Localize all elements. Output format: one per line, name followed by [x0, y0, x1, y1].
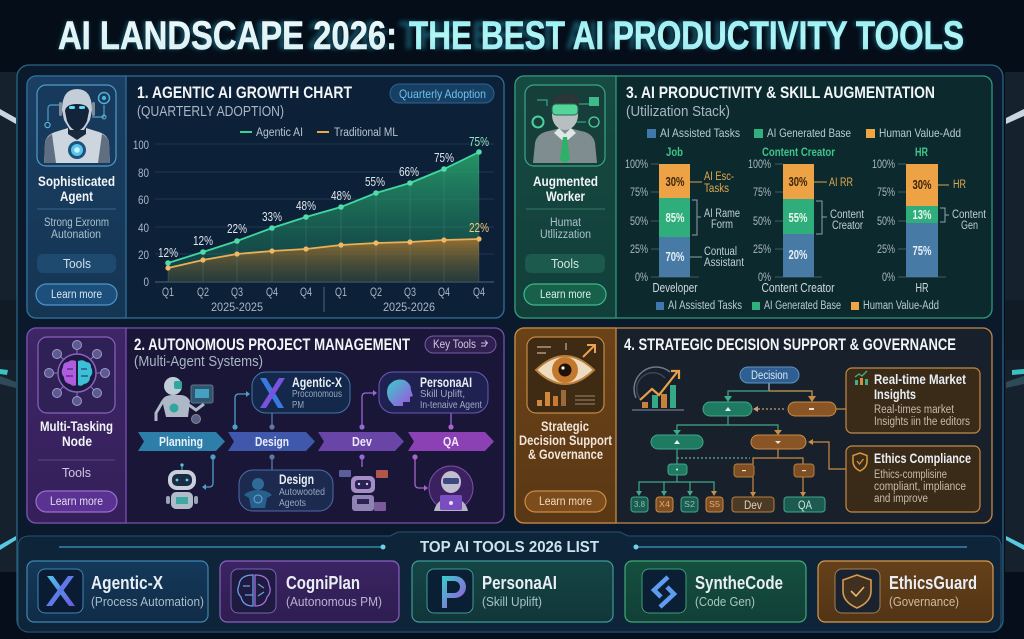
- stacked bar chart: AI RR: [829, 177, 853, 189]
- top legend: Human Value-Add: [879, 126, 961, 140]
- line chart: Q2: [197, 285, 209, 299]
- stacked bar chart: Gen: [961, 220, 978, 232]
- stacked bar chart: Content Creator: [762, 145, 835, 159]
- line chart: Q4: [300, 285, 312, 299]
- callout: ethics compliance: Ethics Compliance: [874, 450, 971, 466]
- sidebar heading: Agent: [60, 189, 93, 204]
- line chart: Q1: [162, 285, 174, 299]
- top legend: [647, 126, 961, 140]
- stacked bar chart: 0%: [758, 270, 771, 284]
- sidebar heading: Multi-Tasking: [40, 419, 113, 434]
- box: design agents: [239, 470, 333, 511]
- learn more button: [524, 284, 606, 305]
- line chart: 48%: [296, 199, 316, 213]
- icon: planning robot: [156, 377, 213, 424]
- card: PersonaAI: PersonaAI: [482, 573, 557, 593]
- line chart: 80: [138, 166, 149, 180]
- line chart: 40: [138, 221, 149, 235]
- heading: (Multi-Agent Systems): [134, 354, 263, 370]
- workflow chevrons: Dev: [352, 434, 373, 449]
- pill: key tools: [425, 336, 496, 353]
- line chart: 33%: [262, 210, 282, 224]
- sidebar heading: [519, 419, 612, 462]
- callout: real-time market insights: [846, 368, 980, 433]
- decision tree: QA: [798, 498, 812, 512]
- stacked bar chart: AI Rame: [704, 208, 740, 220]
- stacked bar chart: Job: [666, 145, 683, 159]
- decision tree: Dev: [744, 498, 762, 512]
- bottom legend: [656, 300, 939, 312]
- stacked bar chart: 30%: [666, 175, 684, 189]
- stacked bar chart: Developer: [652, 281, 698, 295]
- card: Agentic-X: (Process Automation): [91, 594, 204, 609]
- icon: dev robot: [339, 470, 388, 511]
- box: personaai: [379, 372, 488, 413]
- card: EthicsGuard: EthicsGuard: [889, 573, 977, 593]
- icon: growth chart: [632, 367, 684, 410]
- decision tree: X4: [659, 500, 671, 509]
- stacked bar chart: 50%: [630, 214, 648, 228]
- box: personaai: PersonaAI: [420, 375, 472, 390]
- tools pill: Tools: [63, 256, 91, 271]
- stacked bar chart: 55%: [788, 211, 808, 225]
- box: design agents: Ageots: [279, 497, 306, 509]
- heading: 3. AI PRODUCTIVITY & SKILL AUGMENTATION: [626, 83, 935, 102]
- panel 2: autonomous project management: [27, 328, 504, 523]
- sidebar description: Strong Exronm: [44, 217, 109, 229]
- heading: (QUARTERLY ADOPTION): [137, 104, 284, 120]
- box: agentic-x: Proconomous: [292, 388, 342, 400]
- line chart: 60: [138, 193, 149, 207]
- line chart: 12%: [158, 246, 178, 260]
- sidebar heading: Worker: [546, 189, 586, 204]
- stacked bar chart: 20%: [788, 248, 808, 262]
- box: agentic-x: Agentic-X: [292, 375, 342, 390]
- line chart: Q4: [473, 285, 485, 299]
- sidebar description: [540, 217, 591, 241]
- line chart: 2025-2025: [211, 300, 263, 314]
- stacked bar chart: 75%: [912, 244, 932, 258]
- card: PersonaAI: [412, 561, 613, 622]
- stacked bar chart: 50%: [877, 214, 895, 228]
- line chart: 55%: [365, 175, 385, 189]
- top legend: AI Assisted Tasks: [660, 126, 740, 140]
- pill: key tools: Key Tools: [433, 339, 476, 351]
- callout: real-time market insights: Insights: [874, 386, 916, 402]
- line chart: 75%: [469, 135, 489, 149]
- stacked bar chart: 100%: [748, 157, 771, 171]
- stacked bar chart: 100%: [625, 157, 648, 171]
- stacked bar chart: Content Creator: [762, 281, 834, 295]
- sidebar description: Autonation: [51, 229, 101, 241]
- sidebar heading: Augmented: [533, 174, 598, 189]
- line chart: 48%: [331, 189, 351, 203]
- tools pill: Tools: [551, 256, 579, 271]
- learn more button: Learn more: [50, 496, 103, 508]
- heading: (Utilization Stack): [626, 104, 730, 120]
- box: design agents: Autowooted: [279, 486, 325, 498]
- heading: [137, 83, 353, 120]
- sidebar description: Utllizzation: [540, 229, 591, 241]
- sidebar heading: [38, 174, 115, 204]
- card: Agentic-X: [27, 561, 208, 622]
- line chart: 100: [133, 138, 149, 152]
- icon: small helper robot: [166, 463, 198, 509]
- decision tree: S5: [709, 500, 721, 509]
- callout: real-time market insights: Insights iin the editors: [874, 416, 970, 428]
- connectors: [202, 390, 454, 491]
- stacked bar chart: HR: [916, 281, 928, 295]
- stacked bar chart: 75%: [753, 185, 771, 199]
- callout: ethics compliance: compliant, impliance: [874, 481, 966, 493]
- callout: real-time market insights: Real-times market: [874, 404, 955, 416]
- workflow chevrons: Design: [255, 434, 289, 449]
- title: AI LANDSCAPE 2026:: [58, 14, 397, 58]
- bottom legend: Human Value-Add: [863, 300, 939, 312]
- decision tree: S2: [684, 500, 696, 509]
- line chart: Q4: [438, 285, 450, 299]
- stacked bar chart: 25%: [753, 242, 771, 256]
- card: SyntheCode: [625, 561, 806, 622]
- panel 1: agentic AI growth chart: [27, 76, 504, 318]
- line chart: 22%: [227, 222, 247, 236]
- card: CogniPlan: CogniPlan: [286, 573, 360, 593]
- legend: Agentic AI: [256, 127, 303, 139]
- sidebar heading: Node: [62, 434, 92, 449]
- decision tree: 3.8: [634, 500, 646, 509]
- list heading: [59, 539, 967, 556]
- bottom legend: AI Generated Base: [764, 300, 841, 312]
- stacked bar chart: 75%: [877, 185, 895, 199]
- sidebar heading: & Governance: [528, 447, 603, 462]
- card: SyntheCode: (Code Gen): [695, 594, 755, 609]
- decision tree: Decision: [751, 370, 788, 382]
- box: agentic-x: PM: [292, 399, 304, 411]
- top legend: AI Generated Base: [767, 126, 851, 140]
- heading: 1. AGENTIC AI GROWTH CHART: [137, 83, 353, 102]
- stacked bar chart: 75%: [630, 185, 648, 199]
- box: personaai: In-tenaive Agent: [420, 399, 482, 411]
- card: CogniPlan: (Autonomous PM): [286, 594, 382, 609]
- heading: [134, 335, 410, 370]
- icon: QA tester: [429, 466, 473, 511]
- card: EthicsGuard: [818, 561, 993, 622]
- box: personaai: Skill Uplift,: [420, 388, 465, 400]
- workflow chevrons: Planning: [159, 434, 203, 449]
- sidebar heading: [533, 174, 598, 204]
- line chart: Q4: [266, 285, 278, 299]
- box: design agents: Design: [279, 472, 314, 487]
- line chart: 22%: [469, 221, 489, 235]
- pill: quarterly adoption: [390, 84, 494, 103]
- stacked bar chart: 25%: [630, 242, 648, 256]
- icon: sophisticated agent robot: [37, 85, 116, 166]
- sidebar description: Humat: [550, 217, 582, 229]
- sidebar heading: Decision Support: [519, 433, 612, 448]
- card: PersonaAI: (Skill Uplift): [482, 594, 542, 609]
- pill: quarterly adoption: Quarterly Adoption: [399, 87, 486, 101]
- stacked bar chart: Content: [830, 209, 865, 221]
- callout: ethics compliance: and improve: [874, 493, 928, 505]
- sidebar heading: Sophisticated: [38, 174, 115, 189]
- tools pill: [525, 254, 605, 273]
- stacked bar chart: 70%: [666, 250, 684, 264]
- line chart: 75%: [434, 151, 454, 165]
- workflow chevrons: QA: [443, 434, 460, 449]
- heading: 2. AUTONOMOUS PROJECT MANAGEMENT: [134, 335, 410, 354]
- stacked bar chart: 100%: [872, 157, 895, 171]
- panel 3: AI productivity and skill augmentation: [515, 76, 992, 318]
- box: agentic-x: [252, 372, 350, 413]
- panel 4: strategic decision support and governance: [515, 328, 992, 523]
- sidebar heading: [40, 419, 113, 449]
- callout: real-time market insights: Real-time Market: [874, 371, 966, 387]
- heading: [626, 83, 935, 120]
- learn more button: [525, 491, 606, 512]
- decision tree: [631, 367, 846, 512]
- learn more button: Learn more: [539, 496, 592, 508]
- line chart: 12%: [193, 234, 213, 248]
- stacked bar chart: Form: [711, 219, 733, 231]
- sidebar heading: Strategic: [541, 419, 589, 434]
- learn more button: Learn more: [51, 289, 102, 301]
- card: SyntheCode: SyntheCode: [695, 573, 783, 593]
- sidebar description: [44, 217, 109, 241]
- stacked bar chart: HR: [953, 179, 966, 191]
- learn more button: Learn more: [540, 289, 591, 301]
- line chart: Q1: [335, 285, 347, 299]
- card: CogniPlan: [220, 561, 399, 622]
- stacked bar chart: Contual: [704, 246, 737, 258]
- stacked bar chart: 0%: [635, 270, 648, 284]
- panel: top AI tools 2026 list: [18, 532, 1001, 632]
- learn more button: [36, 284, 117, 305]
- stacked bar chart: HR: [915, 145, 928, 159]
- callout: ethics compliance: Ethics-complisine: [874, 469, 947, 481]
- stacked bar chart: AI Esc-: [704, 171, 734, 183]
- line chart: 0: [144, 275, 149, 289]
- stacked bar chart: 13%: [912, 208, 932, 222]
- stacked bar chart: 85%: [666, 211, 684, 225]
- line chart: [133, 135, 494, 314]
- bottom legend: AI Assisted Tasks: [668, 300, 742, 312]
- stacked bar chart: [625, 145, 987, 295]
- tools label: Tools: [62, 465, 91, 480]
- stacked bar chart: 50%: [753, 214, 771, 228]
- stacked bar chart: Assistant: [704, 257, 745, 269]
- stacked bar chart: 0%: [882, 270, 895, 284]
- legend: [240, 127, 399, 139]
- icon: augmented worker: [525, 85, 605, 166]
- stacked bar chart: Content: [952, 209, 987, 221]
- stacked bar chart: 25%: [877, 242, 895, 256]
- line chart: 2025-2026: [383, 300, 435, 314]
- workflow chevrons: [138, 432, 494, 451]
- stacked bar chart: Tasks: [704, 183, 729, 195]
- stacked bar chart: 30%: [788, 175, 808, 189]
- line chart: Q3: [231, 285, 243, 299]
- learn more button: [36, 491, 117, 512]
- stacked bar chart: Creator: [832, 220, 863, 232]
- line chart: Q2: [370, 285, 382, 299]
- line chart: 20: [138, 248, 149, 262]
- stacked bar chart: 30%: [912, 178, 932, 192]
- icon: multi-tasking node: [38, 337, 115, 413]
- icon: strategic eye: [527, 337, 604, 413]
- line chart: 66%: [399, 165, 419, 179]
- callout: ethics compliance: [846, 446, 980, 512]
- tools pill: [37, 254, 116, 273]
- legend: Traditional ML: [334, 127, 399, 139]
- line chart: Q3: [404, 285, 416, 299]
- list heading: TOP AI TOOLS 2026 LIST: [420, 539, 600, 556]
- card: Agentic-X: Agentic-X: [91, 573, 163, 593]
- card: EthicsGuard: (Governance): [889, 594, 959, 609]
